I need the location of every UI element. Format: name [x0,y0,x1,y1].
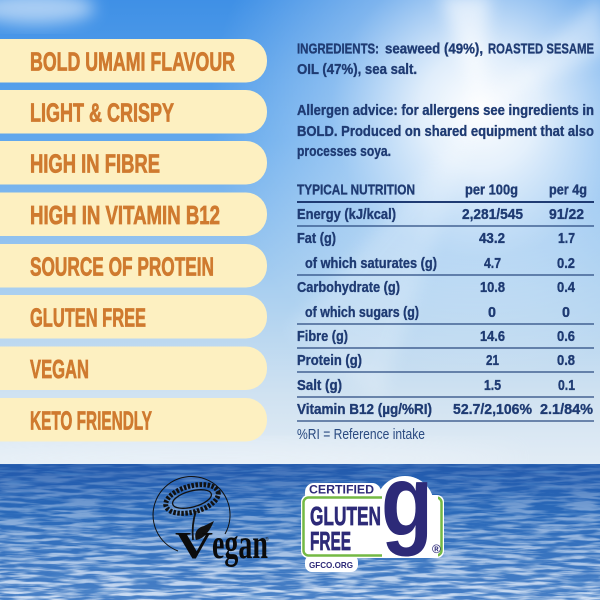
panel: product claims [0,39,267,442]
claim: high in vitamin B12: HIGH IN VITAMIN B12 [30,200,220,230]
claim: keto friendly [0,398,267,442]
row: saturates: of which saturates (g) [305,255,437,272]
row: vitamin B12: 52.7/2,106% [453,401,532,418]
row: saturates [305,255,575,272]
text block: ingredients: INGREDIENTS: [297,40,379,58]
row: fibre [297,328,575,345]
icon: vegan logo: V [175,525,214,567]
row: vitamin B12 [297,401,593,418]
row: saturates: 4.7 [484,255,501,272]
sea background [0,464,600,600]
claim: bold umami flavour [0,39,267,82]
icon: certified gluten free logo [301,445,444,572]
row: saturates: 0.2 [557,255,575,272]
icon: certified gluten free logo: FREE [310,526,351,556]
row: carbohydrate: Carbohydrate (g) [297,279,400,296]
claim: gluten free [0,295,267,338]
claim: high in fibre: HIGH IN FIBRE [30,148,160,178]
row: salt: 0.1 [558,377,575,394]
claim: vegan: VEGAN [30,354,89,384]
icon: certified gluten free logo: GLUTEN [310,501,381,531]
table header: per 100g [465,182,518,198]
table header [297,182,587,198]
row: protein: 0.8 [557,352,575,369]
footnote: %RI = Reference intake [297,426,425,443]
icon: vegan logo: egan [212,522,268,568]
text block: allergen advice: processes soya. [297,143,391,160]
sky background [0,0,600,472]
row: protein: Protein (g) [297,352,362,369]
row: fat [297,230,575,247]
icon: certified gluten free logo: GFCO.ORG [309,560,353,570]
claim: bold umami flavour: BOLD UMAMI FLAVOUR [30,46,235,76]
row: salt [297,377,575,394]
text block: ingredients: OIL (47%), sea salt. [297,61,417,78]
row: vitamin B12: 2.1/84% [540,401,593,418]
table header: per 4g [549,182,587,198]
row: fibre: 0.6 [557,328,575,345]
table header: TYPICAL NUTRITION [297,182,415,198]
icon: vegan logo: ® [265,536,269,543]
claim: high in vitamin B12 [0,192,267,236]
row: fat: 43.2 [479,230,505,247]
row: fibre: 14.6 [480,328,505,345]
row: carbohydrate [297,279,576,296]
row: fat: Fat (g) [297,230,336,247]
text block: ingredients [297,40,594,78]
row: fat: 1.7 [558,230,575,247]
claim: source of protein: SOURCE OF PROTEIN [30,252,214,282]
text block: ingredients: seaweed (49%), [385,40,483,58]
row: sugars: of which sugars (g) [305,304,419,321]
claim: light and crispy [0,90,267,134]
row: sugars [305,304,570,321]
row: energy [297,206,584,223]
row: salt: Salt (g) [297,377,342,394]
row: protein [297,352,575,369]
icon: certified gluten free logo: ® [432,542,441,556]
claim: high in fibre [0,141,267,184]
row: fibre: Fibre (g) [297,328,348,345]
claim: source of protein [0,244,267,288]
row: energy: Energy (kJ/kcal) [297,206,396,223]
claim: vegan [0,346,267,390]
claim: light and crispy: LIGHT & CRISPY [30,98,174,128]
row: protein: 21 [486,352,499,369]
row: vitamin B12: Vitamin B12 (µg/%RI) [297,401,432,418]
row: sugars: 0 [562,304,570,321]
row: carbohydrate: 10.8 [480,279,505,296]
row: sugars: 0 [488,304,496,321]
icon: certified gluten free logo: CERTIFIED [309,482,374,496]
text block: allergen advice [297,102,594,160]
icon: certified gluten free logo: g [381,445,433,557]
nutrition table [297,182,594,443]
row: carbohydrate: 0.4 [557,279,576,296]
claim: keto friendly: KETO FRIENDLY [30,406,152,436]
row: energy: 2,281/545 [462,206,523,223]
claim: gluten free: GLUTEN FREE [30,302,146,332]
row: energy: 91/22 [549,206,584,223]
icon: vegan logo [153,476,269,568]
row: salt: 1.5 [484,377,501,394]
